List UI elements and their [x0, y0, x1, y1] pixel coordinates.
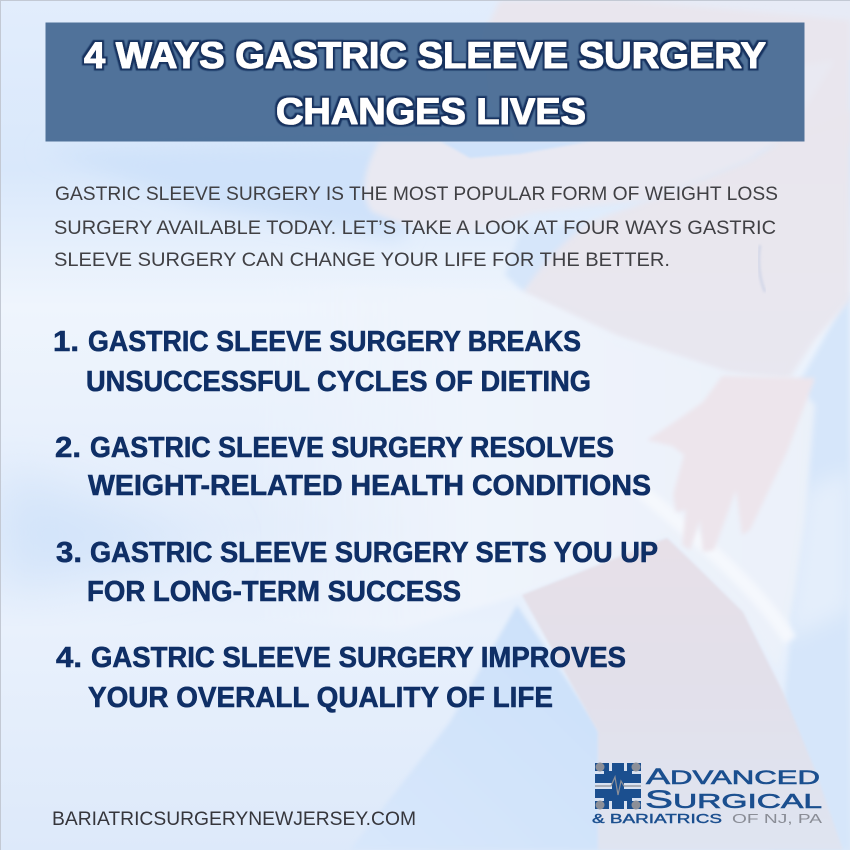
towel	[250, 280, 815, 668]
upper arm band	[364, 60, 835, 232]
hand	[647, 376, 815, 552]
title banner	[46, 22, 804, 142]
way 2	[55, 432, 651, 502]
way 1: UNSUCCESSFUL CYCLES OF DIETING	[86, 366, 591, 398]
logo wordmark: & BARIATRICS	[592, 812, 722, 826]
skin upper body	[483, 0, 850, 145]
blue left band	[0, 470, 220, 590]
way 1	[53, 326, 591, 398]
way 3: FOR LONG-TERM SUCCESS	[87, 576, 461, 608]
title line 2: CHANGES LIVES	[276, 91, 586, 132]
intro paragraph: GASTRIC SLEEVE SURGERY IS THE MOST POPULAR FORM OF WEIGHT LOSS	[55, 183, 778, 205]
logo wordmark: A DVANCED	[646, 764, 820, 789]
towel folds	[640, 490, 790, 640]
blue wedge below banner	[40, 140, 440, 240]
way 2: GASTRIC SLEEVE SURGERY RESOLVES	[90, 432, 614, 464]
way 4: 4.	[56, 642, 82, 674]
intro paragraph: SURGERY AVAILABLE TODAY. LET’S TAKE A LOOK AT FOUR WAYS GASTRIC	[54, 217, 776, 239]
logo wordmark: OF NJ, PA	[732, 812, 823, 826]
intro paragraph	[54, 183, 778, 271]
way 2: WEIGHT-RELATED HEALTH CONDITIONS	[88, 470, 651, 502]
website url: BARIATRICSURGERYNEWJERSEY.COM	[52, 808, 416, 830]
way 4	[56, 642, 626, 714]
way 2: 2.	[55, 432, 81, 464]
torso	[523, 110, 850, 385]
blue right side	[770, 290, 850, 850]
way 4: YOUR OVERALL QUALITY OF LIFE	[88, 682, 553, 714]
way 3: GASTRIC SLEEVE SURGERY SETS YOU UP	[90, 537, 658, 569]
way 1: 1.	[53, 326, 79, 358]
icon: medical cross with heartbeat	[595, 762, 641, 810]
navel shadow	[759, 245, 765, 292]
way 1: GASTRIC SLEEVE SURGERY BREAKS	[88, 326, 581, 358]
blue bottom area	[350, 605, 600, 850]
blue wedge beside waist	[505, 222, 590, 293]
logo wordmark: S URGICAL	[645, 786, 822, 814]
way 3	[56, 537, 658, 608]
blue wedge under banner	[440, 141, 592, 158]
top right pale	[560, 0, 850, 60]
way 3: 3.	[56, 537, 82, 569]
thigh	[522, 538, 843, 850]
title line 1: 4 WAYS GASTRIC SLEEVE SURGERY	[84, 35, 766, 76]
way 4: GASTRIC SLEEVE SURGERY IMPROVES	[91, 642, 626, 674]
intro paragraph: SLEEVE SURGERY CAN CHANGE YOUR LIFE FOR THE BETTER.	[54, 249, 670, 271]
logo: Advanced Surgical	[592, 762, 823, 826]
logo wordmark	[592, 764, 823, 826]
